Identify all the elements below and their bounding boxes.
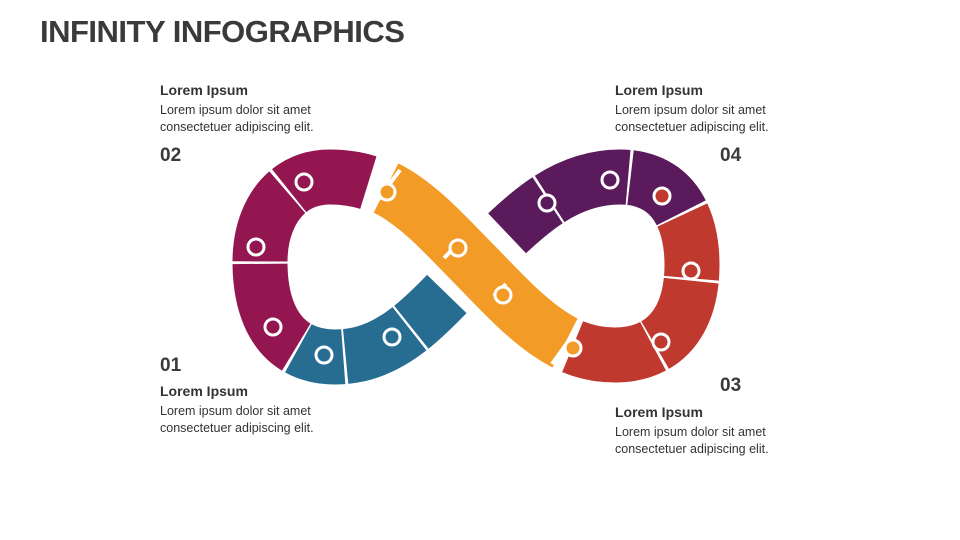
segment: purple: [475, 177, 692, 355]
text: bottom-left: [160, 383, 314, 435]
segment: magenta: [260, 177, 475, 357]
number 02: 02: [160, 145, 181, 166]
text: top-left: consectetuer adipiscing elit.: [160, 120, 314, 134]
number 03: 03: [720, 375, 741, 396]
segment: orange: [372, 170, 578, 364]
text: bottom-right: consectetuer adipiscing elit.: [615, 442, 769, 456]
number 04: 04: [720, 145, 741, 166]
text: bottom-right: Lorem ipsum dolor sit amet: [615, 425, 766, 439]
text: bottom-left: Lorem Ipsum: [160, 383, 248, 399]
text: top-right: Lorem ipsum dolor sit amet: [615, 103, 766, 117]
segment: blue: [260, 177, 475, 357]
text: top-left: Lorem Ipsum: [160, 82, 248, 98]
title: INFINITY INFOGRAPHICS: [40, 14, 404, 49]
text: top-right: [615, 82, 769, 134]
text: top-left: Lorem ipsum dolor sit amet: [160, 103, 311, 117]
puzzle knobs: [248, 172, 699, 363]
text: bottom-right: Lorem Ipsum: [615, 404, 703, 420]
text: bottom-right: [615, 404, 769, 456]
text: top-left: [160, 82, 314, 134]
text: bottom-left: consectetuer adipiscing elit.: [160, 421, 314, 435]
segment: red: [475, 177, 692, 355]
text: top-right: consectetuer adipiscing elit.: [615, 120, 769, 134]
text: top-right: Lorem Ipsum: [615, 82, 703, 98]
text: bottom-left: Lorem ipsum dolor sit amet: [160, 404, 311, 418]
number 01: 01: [160, 355, 181, 376]
